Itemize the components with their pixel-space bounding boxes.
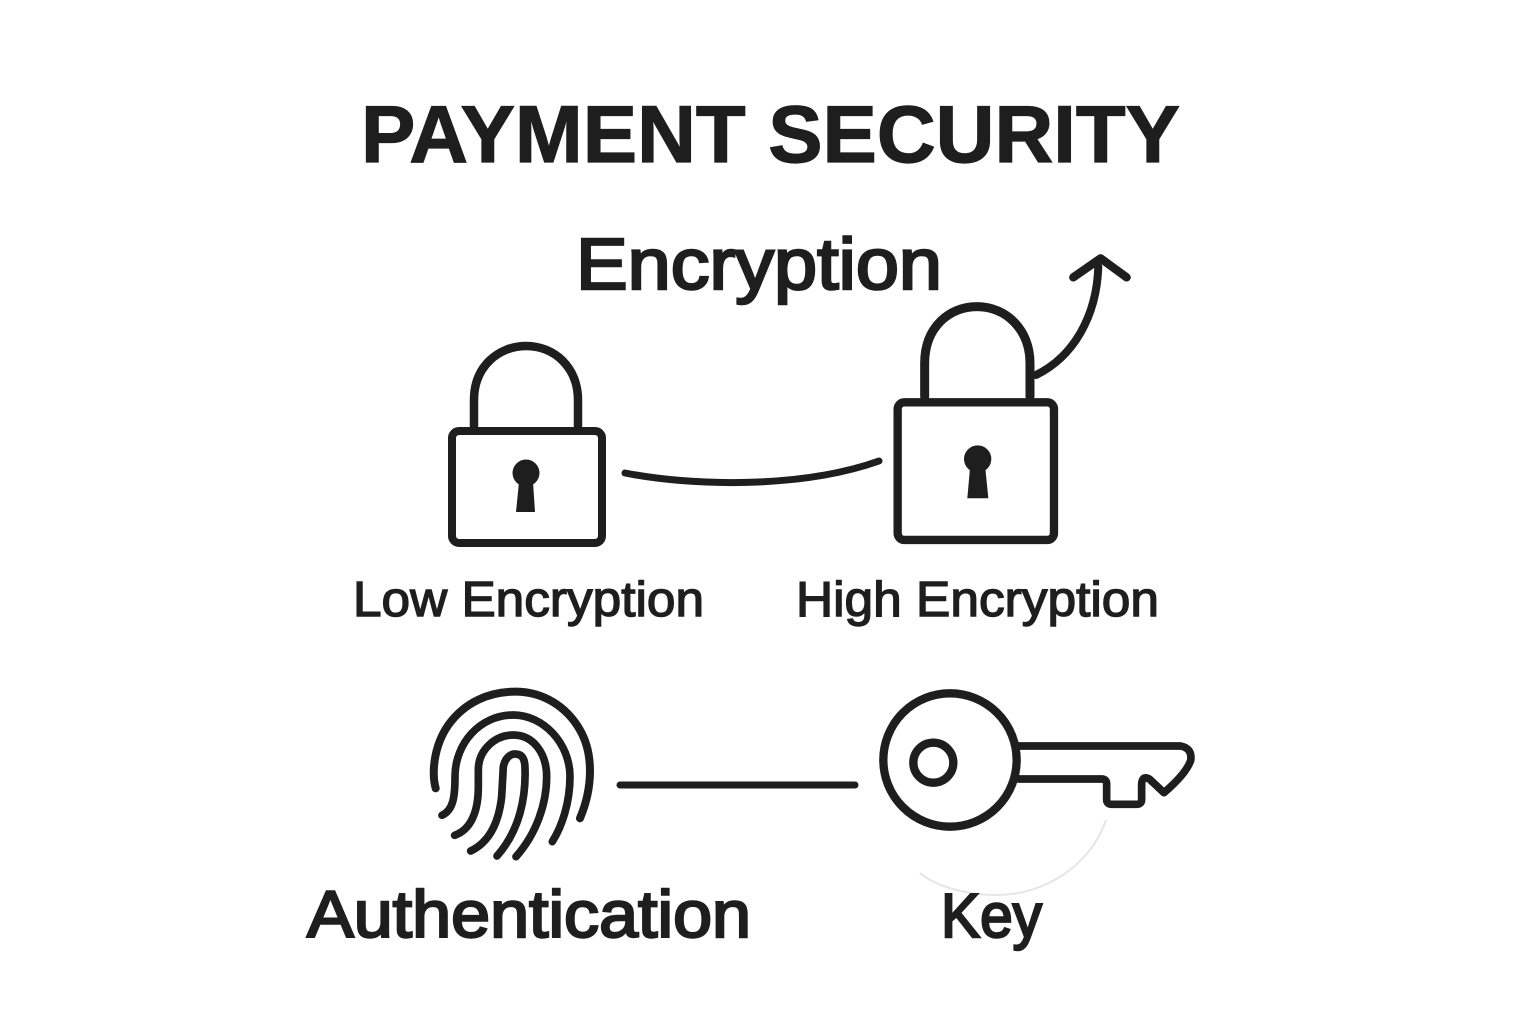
connector: low to high encryption xyxy=(625,461,879,483)
label: high encryption: High Encryption xyxy=(796,573,1159,627)
icon: key xyxy=(883,693,1191,827)
label: low encryption: Low Encryption xyxy=(353,573,704,627)
label: key: Key xyxy=(941,882,1042,951)
icon: high encryption padlock xyxy=(898,307,1054,540)
decorative faint arc under key xyxy=(920,820,1106,895)
arrow: rising encryption xyxy=(1036,258,1127,375)
icon: fingerprint xyxy=(434,692,590,857)
heading: encryption: Encryption xyxy=(576,225,942,305)
connector: authentication to key xyxy=(620,782,855,788)
label: authentication: Authentication xyxy=(307,877,751,951)
icon: low encryption padlock xyxy=(452,346,602,543)
title: PAYMENT SECURITY xyxy=(361,90,1180,180)
